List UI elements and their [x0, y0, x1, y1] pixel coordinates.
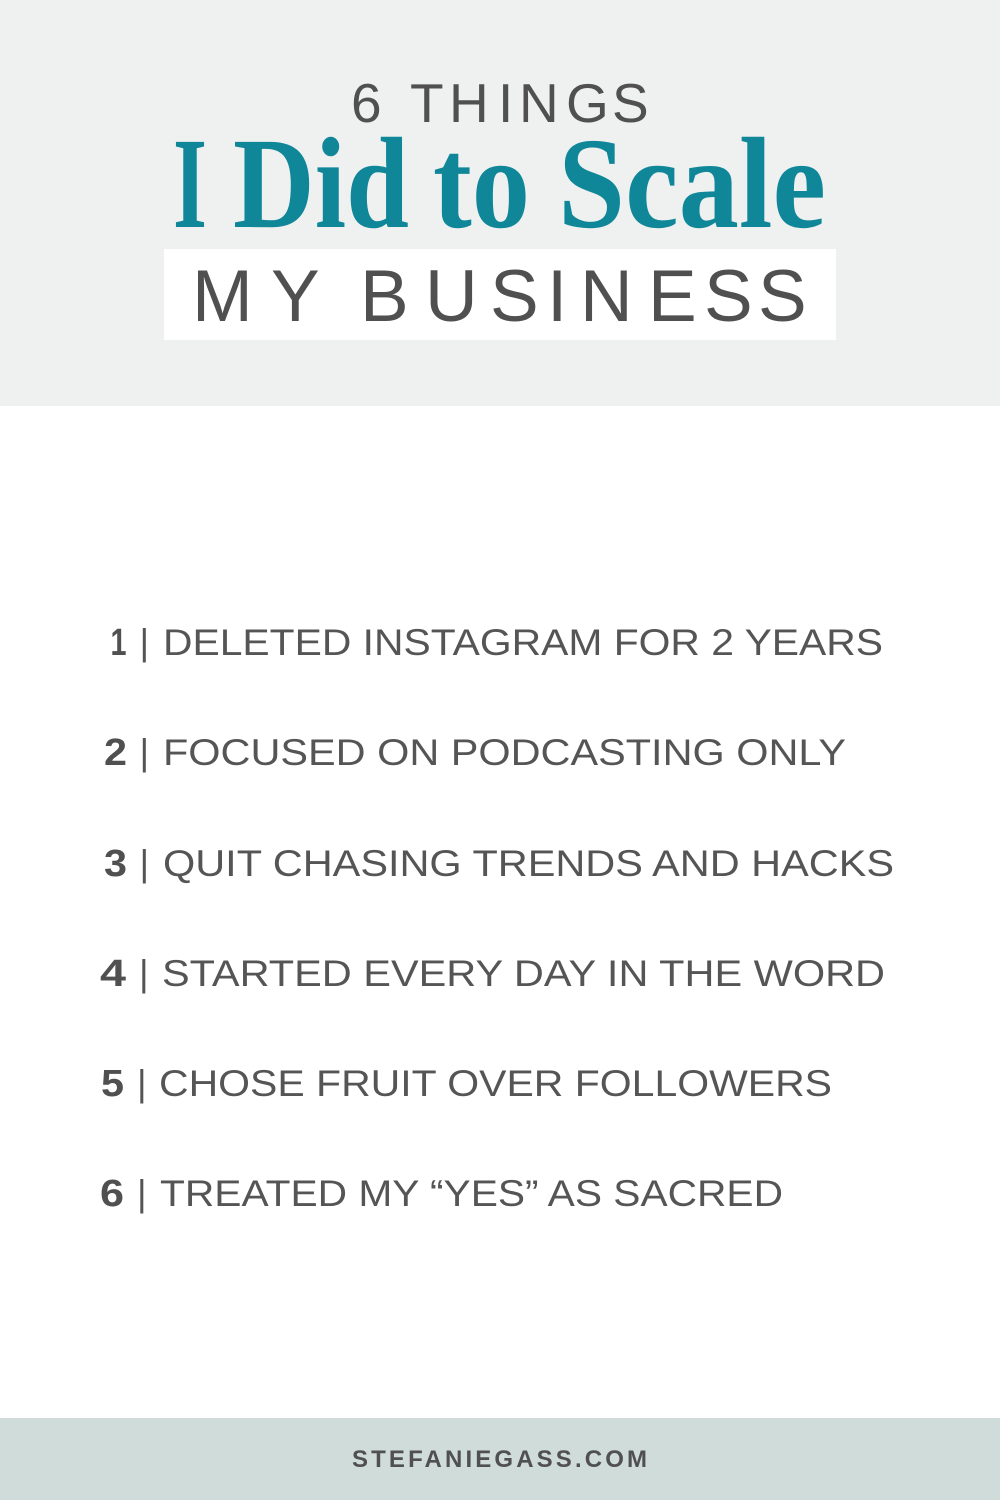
item 2: 2 [104, 732, 127, 774]
item 5: CHOSE FRUIT OVER FOLLOWERS [159, 1063, 832, 1104]
item 6: TREATED MY “YES” AS SACRED [160, 1173, 783, 1214]
item 2: FOCUSED ON PODCASTING ONLY [163, 732, 846, 773]
header panel [0, 0, 1000, 406]
heading box: my business: MY BUSINESS [192, 256, 807, 337]
footer text: STEFANIEGASS.COM [352, 1446, 647, 1473]
item 5: | [137, 1063, 147, 1104]
heading: I did to scale: I [173, 112, 207, 256]
item 6: 6 [100, 1173, 124, 1215]
heading: I did to scale: to [433, 112, 530, 256]
heading: I did to scale: Scale [558, 112, 826, 256]
heading: I did to scale: Did [233, 112, 409, 256]
item 4: | [139, 953, 149, 994]
item 3: | [140, 843, 149, 884]
item 1: | [140, 622, 149, 663]
item 1: DELETED INSTAGRAM FOR 2 YEARS [163, 622, 883, 663]
item 5: 5 [101, 1063, 124, 1105]
item 6: | [137, 1173, 147, 1214]
heading: 6 things: 6 THINGS [351, 72, 649, 134]
item 4: 4 [100, 953, 126, 995]
item 1: 1 [110, 622, 126, 664]
item 2: | [140, 732, 149, 773]
item 4: STARTED EVERY DAY IN THE WORD [162, 953, 885, 994]
item 3: 3 [104, 843, 127, 885]
footer bar [0, 1418, 1000, 1500]
heading: I did to scale [173, 112, 826, 256]
item 3: QUIT CHASING TRENDS AND HACKS [163, 843, 894, 884]
list of six things [100, 622, 894, 1215]
